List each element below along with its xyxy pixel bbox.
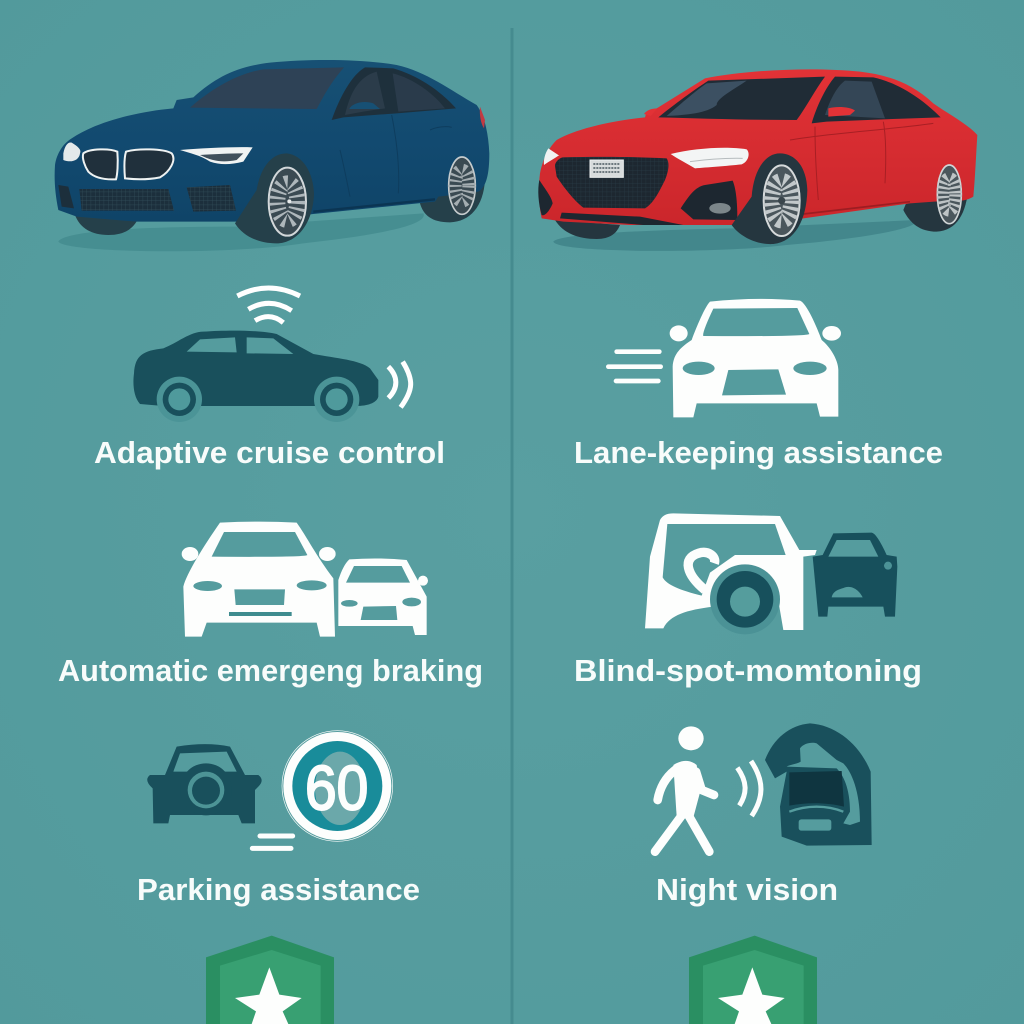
icon: emergency braking two cars — [182, 522, 428, 637]
icon: night vision pedestrian and camera — [655, 723, 872, 852]
label: adaptive cruise control: Adaptive cruise control — [94, 435, 445, 470]
icon: parking car with speed sign: 60 — [305, 753, 368, 823]
icon: right safety shield — [689, 936, 817, 1024]
icon: adaptive cruise car with signal waves — [133, 288, 411, 422]
label: lane-keeping assistance: Lane-keeping assistance — [574, 435, 943, 470]
center divider — [510, 28, 514, 1024]
icon: blind-spot monitoring cars — [645, 513, 897, 634]
icon: parking car with speed sign — [147, 731, 393, 848]
icon: left safety shield — [206, 936, 334, 1024]
label: automatic emergency braking: Automatic emergeng braking — [58, 653, 483, 688]
blue car illustration — [55, 60, 489, 251]
icon: lane-keeping car with motion lines — [608, 299, 841, 417]
label: night vision: Night vision — [656, 872, 838, 907]
label: parking assistance: Parking assistance — [137, 872, 420, 907]
label: blind-spot monitoring: Blind-spot-momtoning — [574, 653, 922, 688]
red car illustration — [538, 69, 977, 251]
